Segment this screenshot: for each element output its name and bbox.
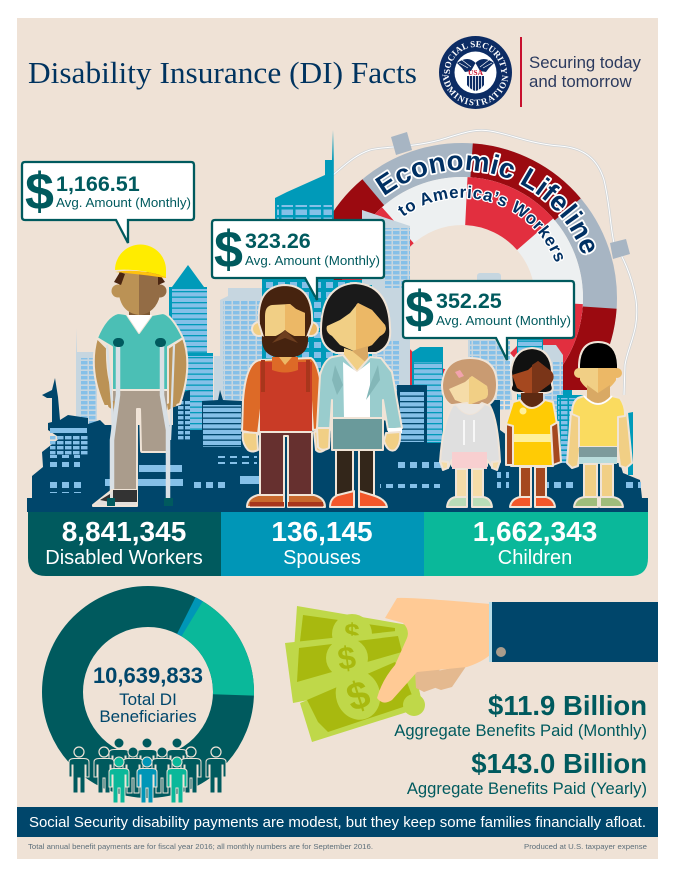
person: wife spouse — [317, 283, 402, 507]
callout: children amount: Avg. Amount (Monthly) — [436, 313, 571, 328]
tagline divider — [520, 37, 522, 107]
illustration: hand holding money — [285, 598, 658, 742]
donut centre label: Total DI — [119, 690, 177, 709]
icon: crowd of people — [69, 738, 226, 803]
stat band: disabled workers: Disabled Workers — [45, 547, 203, 569]
person: child in yellow dress — [506, 348, 561, 507]
banner message — [17, 807, 658, 837]
donut centre label — [93, 663, 203, 726]
callout: spouses amount: 323.26 — [245, 229, 311, 253]
callout: disabled workers amount — [22, 162, 194, 243]
person: disabled worker on crutches — [93, 245, 187, 506]
tagline — [529, 53, 642, 91]
footnote: taxpayer expense: Produced at U.S. taxpayer expense — [524, 842, 647, 851]
callout: spouses amount — [212, 220, 384, 300]
stat band: spouses: Spouses — [283, 547, 361, 569]
stat band: spouses — [221, 512, 424, 576]
callout: children amount: $ — [405, 281, 434, 339]
callout: spouses amount: Avg. Amount (Monthly) — [245, 253, 380, 268]
stat: monthly aggregate benefits: Aggregate Benefits Paid (Monthly) — [394, 721, 647, 740]
ring heading: Economic Lifeline: Economic Lifeline — [373, 152, 596, 256]
illustration: hand holding money: $ — [341, 673, 376, 720]
tagline: Securing today — [529, 53, 642, 72]
stat: yearly aggregate benefits: Aggregate Benefits Paid (Yearly) — [407, 779, 647, 798]
tagline: and tomorrow — [529, 72, 632, 91]
footnote: data source: Total annual benefit payments are for fiscal year 2016; all monthly numbers are for September 2016. — [28, 842, 373, 851]
person: child in yellow shirt — [567, 342, 632, 507]
dark foreground skyline — [27, 378, 648, 512]
stat band: disabled workers — [28, 512, 221, 576]
ring subheading: to America's Workers: to America’s Workers — [396, 184, 564, 263]
banner message: Social Security disability payments are modest, but they keep some families financially afloat. — [29, 815, 646, 831]
stat band: disabled workers: 8,841,345 — [62, 516, 186, 547]
callout: disabled workers amount: $ — [25, 163, 54, 221]
stat: yearly aggregate benefits: $143.0 Billion — [471, 748, 647, 779]
icon: Social Security Administration seal: SOCIAL SECURITY — [444, 41, 508, 74]
stat: monthly aggregate benefits: $11.9 Billion — [488, 690, 647, 721]
illustration: hand holding money: $ — [344, 618, 360, 649]
callout: disabled workers amount: Avg. Amount (Monthly) — [56, 195, 191, 210]
callout: children amount — [403, 281, 574, 360]
stat band: children — [424, 512, 648, 576]
donut chart: total beneficiaries — [30, 574, 266, 810]
illustration: hand holding money: $ — [335, 639, 358, 677]
stat: yearly aggregate benefits — [407, 748, 647, 798]
title: Disability Insurance (DI) Facts — [28, 56, 417, 90]
callout: children amount: 352.25 — [436, 289, 502, 313]
donut centre label: Beneficiaries — [99, 707, 197, 726]
background skyline: light and teal buildings — [76, 130, 633, 475]
life ring with rope — [334, 129, 638, 395]
donut centre label: 10,639,833 — [93, 663, 203, 688]
stat band: spouses: 136,145 — [271, 516, 373, 547]
callout: disabled workers amount: 1,166.51 — [56, 172, 140, 196]
stat band: children: 1,662,343 — [473, 516, 597, 547]
person: husband spouse — [242, 285, 330, 507]
icon: Social Security Administration seal — [439, 36, 512, 109]
person: child in grey hoodie — [440, 358, 500, 507]
icon: Social Security Administration seal: ADMINISTRATION — [442, 74, 508, 106]
icon: Social Security Administration seal: USA — [468, 68, 484, 77]
stat: monthly aggregate benefits — [394, 690, 647, 740]
callout: spouses amount: $ — [214, 221, 243, 279]
stat band: children: Children — [498, 547, 572, 569]
